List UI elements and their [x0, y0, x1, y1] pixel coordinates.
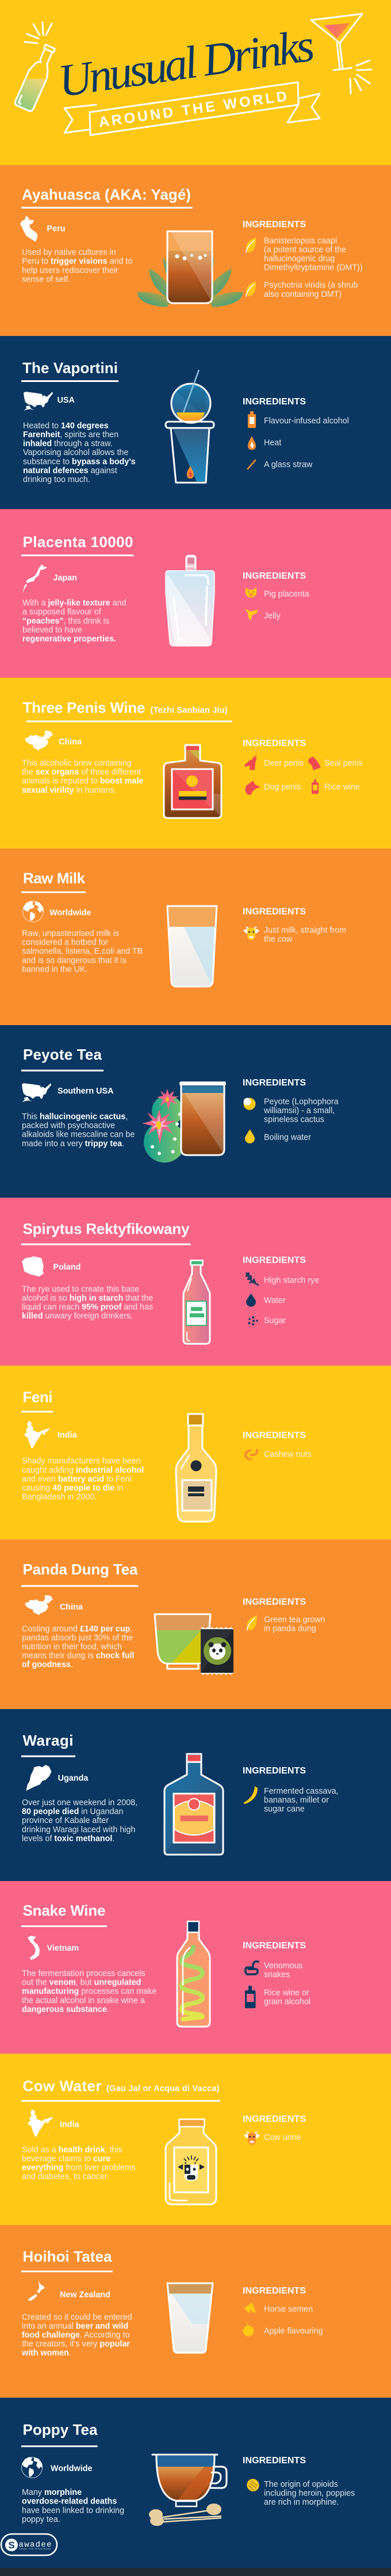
illustration: tea cup and packet — [155, 1614, 233, 1675]
map: China — [25, 1595, 53, 1615]
description: beverage claims to cure — [22, 2154, 110, 2164]
description: Bangladesh in 2000. — [22, 1492, 97, 1501]
ingredients: A glass straw — [264, 460, 313, 469]
icon: horse — [244, 2303, 256, 2313]
ingredients: hallucinogenic drug — [264, 254, 335, 263]
ingredients: The origin of opioids — [264, 2480, 338, 2489]
icon: cow on label — [178, 2155, 205, 2181]
icon: leaf — [246, 281, 256, 296]
icon: straw — [248, 460, 255, 469]
description: nutrition in their food, which — [22, 1642, 122, 1652]
country: China — [59, 737, 82, 747]
description: With a jelly-like texture and — [22, 598, 126, 607]
description: manufacturing — [22, 1987, 79, 1996]
ingredients: INGREDIENTS — [243, 907, 306, 917]
country: Poland — [53, 1263, 80, 1272]
description: alkaloids like mescaline can be — [22, 1130, 135, 1140]
ingredients: Sugar — [264, 1316, 286, 1325]
country: Peru — [47, 224, 66, 234]
ingredients: INGREDIENTS — [243, 220, 306, 230]
panel: Hoihoi Tatea — [0, 2225, 391, 2398]
description: substance to bypass a body's — [23, 457, 136, 467]
description: This hallucinogenic cactus, — [22, 1113, 128, 1122]
description: Many morphine — [22, 2488, 82, 2497]
country: USA — [57, 396, 75, 405]
icon: cow — [243, 927, 259, 940]
icon: leaf — [247, 1615, 257, 1630]
ingredients — [243, 907, 346, 944]
description: levels of toxic methanol. — [22, 1834, 114, 1843]
icon: seal — [308, 756, 321, 770]
map: New Zealand — [28, 2280, 45, 2301]
description: The rye used to create this base — [22, 1285, 139, 1294]
heading: Waragi — [23, 1732, 74, 1749]
ingredients — [243, 1941, 310, 2008]
icon: bottle — [245, 1986, 255, 2008]
description: Created so it could be entered — [22, 2313, 132, 2322]
map: USA — [22, 1083, 51, 1102]
description: out the venom, but unregulated — [22, 1978, 141, 1988]
ingredients: INGREDIENTS — [243, 1078, 306, 1088]
country: Japan — [53, 574, 77, 583]
map: India — [24, 1421, 49, 1448]
heading: Raw Milk — [23, 870, 86, 887]
description: 80 people died — [22, 1807, 79, 1817]
illustration: hoihoi glass — [167, 2283, 213, 2353]
panel: Three Penis Wine — [0, 678, 391, 849]
ingredients: Rice wine or — [264, 1988, 309, 1997]
heading: Panda Dung Tea — [23, 1561, 138, 1578]
description: and is so dangerous that it is — [22, 956, 126, 965]
description: in Ugandan — [81, 1807, 123, 1817]
map: USA — [24, 392, 53, 411]
ingredients: INGREDIENTS — [243, 1766, 306, 1776]
icon: drop — [245, 1129, 255, 1144]
description: against — [91, 466, 117, 475]
ingredients: INGREDIENTS — [243, 2115, 306, 2124]
ingredients — [243, 1766, 339, 1814]
map: Poland — [22, 1256, 44, 1276]
description: caught adding industrial alcohol — [22, 1466, 144, 1475]
ingredients: Boiling water — [264, 1133, 311, 1142]
description: , spirits are then — [60, 430, 118, 439]
panel: Panda Dung Tea — [0, 1539, 391, 1709]
ingredients: the cow — [264, 935, 293, 944]
description: inhaled — [23, 439, 52, 449]
description: Over just one weekend in 2008, — [22, 1798, 137, 1807]
description: made into a very trippy tea. — [22, 1139, 124, 1148]
ingredients — [243, 1078, 339, 1144]
icon: water drop — [246, 1293, 256, 1307]
illustration: spirytus bottle — [183, 1260, 210, 1344]
description: province of Kabale after — [22, 1816, 109, 1825]
ingredients: Apple flavouring — [264, 2327, 323, 2336]
description: . — [107, 2005, 109, 2015]
ingredients: Dog penis — [264, 782, 301, 792]
description: animals is reputed to boost male — [22, 777, 143, 786]
description: . — [69, 2349, 71, 2358]
description: believed to have — [22, 626, 82, 635]
ingredients — [243, 1256, 319, 1325]
ingredients: INGREDIENTS — [243, 1256, 306, 1266]
icon: peyote — [244, 1098, 255, 1110]
icon: banana — [243, 1786, 258, 1804]
ingredients: (a potent source of the — [264, 245, 346, 254]
ingredients: are rich in morphine. — [264, 2498, 339, 2507]
description: everything — [22, 2163, 63, 2172]
icon: martini glass — [311, 14, 362, 70]
description: “peaches” — [22, 617, 64, 626]
ingredients: williamsii) - a small, — [263, 1106, 335, 1115]
heading: Spirytus Rektyfikowany — [23, 1220, 190, 1237]
ingredients: INGREDIENTS — [243, 397, 306, 407]
description: the creators, it's very popular — [22, 2340, 130, 2349]
logo: Sawadee: S — [8, 2540, 15, 2551]
ingredients: Rice wine — [324, 782, 360, 792]
ingredients: INGREDIENTS — [243, 2456, 306, 2466]
ingredients: Just milk, straight from — [264, 926, 346, 935]
description: liquid can reach 95% proof and has — [22, 1303, 153, 1312]
ingredients: Heat — [264, 438, 281, 448]
description: killed — [22, 1312, 43, 1321]
description: packed with psychoactive — [22, 1121, 115, 1130]
description: overdose-related deaths — [22, 2497, 117, 2506]
ingredients — [243, 2456, 355, 2507]
illustration: peyote tea — [142, 1081, 226, 1163]
description: Raw, unpasteurised milk is — [22, 929, 119, 938]
description: from liver problems — [66, 2163, 136, 2172]
country: India — [60, 2120, 80, 2130]
ingredients — [243, 1431, 312, 1459]
heading: Placenta 10000 — [23, 533, 133, 551]
panel: Raw Milk — [0, 849, 391, 1025]
icon: jelly — [245, 609, 258, 621]
icon: snake — [246, 1962, 258, 1974]
description: into an annual beer and wild — [22, 2322, 128, 2331]
description: have been linked to drinking — [22, 2506, 124, 2515]
ingredients: snakes — [264, 1970, 290, 1979]
ingredients: spineless cactus — [264, 1115, 324, 1125]
logo: Sawadee — [1, 2534, 57, 2555]
ingredients: Horse semen — [264, 2305, 313, 2314]
ingredients: Seal penis — [324, 759, 363, 768]
ingredients: INGREDIENTS — [243, 1597, 306, 1607]
icon: tilted bottle — [14, 43, 59, 112]
icon: bottle — [248, 411, 256, 428]
ingredients: sugar cane — [264, 1805, 305, 1814]
ingredients: Deer penis — [264, 759, 304, 768]
description: drinking Waragi laced with high — [22, 1825, 135, 1834]
description: This alcoholic brew containing — [22, 759, 132, 768]
panel: Ayahuasca — [0, 165, 391, 336]
map: China — [25, 731, 53, 751]
icon: pig — [246, 587, 256, 598]
ingredients — [243, 739, 363, 795]
description: banned in the UK. — [22, 965, 87, 974]
panel: Peyote Tea — [0, 1025, 391, 1198]
ingredients: Pig placenta — [264, 590, 309, 599]
icon: deer — [244, 753, 257, 770]
ingredients: High starch rye — [264, 1276, 319, 1285]
ingredients: Peyote (Lophophora — [264, 1098, 339, 1107]
country: New Zealand — [60, 2291, 110, 2300]
subtitle: around the world: AROUND THE WORLD — [98, 88, 288, 131]
map: India — [28, 2109, 53, 2137]
illustration: pouch — [166, 556, 214, 646]
ingredients: Green tea grown — [264, 1615, 325, 1625]
description: poppy tea. — [22, 2515, 60, 2524]
panel: Waragi — [0, 1709, 391, 1881]
ingredients: INGREDIENTS — [243, 1431, 306, 1440]
icon: flame — [248, 436, 256, 450]
description: a supposed flavour of — [22, 607, 101, 617]
description: alcohol is so high in starch that the — [22, 1294, 153, 1303]
heading: Poppy Tea — [23, 2421, 98, 2438]
icon: dog — [245, 781, 260, 795]
description: causing 40 people to die in — [22, 1484, 123, 1493]
panel: Poppy Tea — [0, 2398, 391, 2568]
ingredients: grain alcohol — [264, 1997, 310, 2006]
ingredients: Venomous — [264, 1962, 303, 1971]
alternate name: (Tezhi Sanbian Jiu) — [151, 706, 228, 715]
description: Farenheit — [23, 430, 60, 439]
logo: Sawadee: Taste The Difference — [19, 2548, 51, 2550]
illustration: waragi bottle — [164, 1754, 223, 1855]
icon: cow — [244, 2132, 260, 2145]
description: Sold as a health drink, this — [22, 2146, 122, 2155]
ingredients: INGREDIENTS — [243, 1941, 306, 1951]
ingredients: Psychotria viridis (a shrub — [264, 281, 358, 290]
country: Uganda — [58, 1774, 89, 1783]
ingredients — [243, 220, 363, 299]
description: sexual virility — [22, 786, 74, 795]
description: unwary foreign drinkers. — [45, 1312, 133, 1321]
description: Heated to 140 degrees — [23, 421, 109, 430]
panel: The Vaportini — [0, 336, 391, 509]
description: food challenge — [22, 2331, 80, 2340]
illustration: snake wine bottle — [177, 1921, 210, 2027]
ingredients: Cow urine — [264, 2133, 301, 2142]
heading: Ayahuasca (AKA: Yagé) — [22, 186, 191, 203]
map: Uganda — [26, 1765, 52, 1791]
icon: cashew — [246, 1450, 257, 1459]
icon: martini sparkle rays — [350, 60, 371, 94]
icon: rye — [246, 1272, 259, 1285]
description: with women — [21, 2349, 69, 2358]
description: natural defences — [23, 466, 89, 475]
map: Vietnam — [28, 1936, 40, 1960]
description: processes can make — [81, 1987, 156, 1996]
ingredients: Fermented cassava, — [264, 1787, 339, 1796]
heading: Snake Wine — [23, 1902, 106, 1919]
panel: Snake Wine — [0, 1881, 391, 2054]
ingredients: Flavour-infused alcohol — [264, 416, 349, 426]
ingredients — [243, 571, 309, 621]
title: Unusual Drinks: Unusual Drinks — [55, 20, 317, 107]
ingredients: Banisteriopsis caapi — [264, 236, 337, 246]
ingredients: INGREDIENTS — [243, 739, 306, 748]
alternate name: (Gau Jal or Acqua di Vacca) — [106, 2084, 220, 2093]
icon: bottle sparkle rays — [25, 22, 52, 43]
icon: poppy — [244, 2476, 262, 2494]
heading: Feni — [23, 1389, 53, 1406]
description: Used by native cultures in — [22, 248, 116, 257]
heading: Three Penis Wine — [23, 699, 145, 716]
ingredients — [243, 2286, 323, 2337]
heading: Cow Water — [23, 2077, 101, 2095]
description: Peru to trigger visions and to — [22, 257, 132, 266]
description: salmonella, listeria, E.coli and TB — [22, 947, 143, 956]
description: through a straw. — [54, 439, 113, 449]
icon: bottle — [312, 779, 319, 794]
country: Worldwide — [49, 908, 91, 918]
description: the actual alcohol in snake wine a — [22, 1996, 145, 2005]
description: help users rediscover their — [22, 266, 118, 275]
panel: Spirytus Rektyfikowany — [0, 1198, 391, 1366]
icon: sugar — [248, 1316, 258, 1325]
map: Peru — [20, 216, 37, 242]
country: Vietnam — [47, 1944, 79, 1953]
ribbon banner — [64, 82, 320, 135]
description: regenerative properties. — [22, 635, 116, 644]
panel: Placenta 10000 — [0, 509, 391, 678]
illustration: wine bottle — [164, 745, 221, 818]
icon: leaf — [246, 238, 256, 253]
illustration: milk glass — [167, 906, 217, 987]
illustration: feni bottle — [176, 1414, 216, 1522]
map: Japan — [22, 564, 47, 593]
description: sense of self. — [22, 275, 70, 284]
description: Shady manufacturers have been — [22, 1457, 141, 1466]
description: drinking too much. — [23, 475, 90, 484]
ingredients: INGREDIENTS — [243, 571, 306, 581]
description: . According to — [80, 2331, 130, 2340]
country: China — [60, 1603, 83, 1612]
illustration: cow water bottle — [166, 2119, 216, 2204]
description: The fermentation process cancels — [22, 1969, 145, 1978]
icon: apple — [243, 2322, 254, 2337]
ingredients: also containing DMT) — [264, 290, 342, 299]
description: considered a hotbed for — [22, 938, 108, 947]
logo: Sawadee: awadee — [18, 2540, 52, 2550]
description: and diabetes, to cancer. — [22, 2172, 109, 2181]
illustration: vaportini — [166, 370, 214, 483]
ingredients: Water — [264, 1296, 286, 1305]
description: Vaporising alcohol allows the — [23, 448, 128, 457]
ingredients: in panda dung — [264, 1625, 316, 1634]
description: the sex organs of three different — [22, 767, 141, 777]
heading: Hoihoi Tatea — [23, 2248, 112, 2265]
heading: The Vaportini — [22, 359, 118, 376]
ingredients — [243, 2115, 306, 2145]
country: India — [57, 1431, 78, 1440]
ingredients — [243, 1597, 325, 1634]
ingredients: bananas, millet or — [264, 1796, 329, 1805]
description: means their dung is chock full — [22, 1652, 134, 1661]
panel: header — [0, 0, 391, 165]
country: Worldwide — [51, 2464, 92, 2474]
illustration: ayahuasca glass with leaves — [137, 231, 243, 307]
description: . — [71, 1660, 73, 1669]
ingredients: INGREDIENTS — [243, 2286, 306, 2296]
description: pandas absorb just 30% of the — [22, 1634, 133, 1643]
ingredients: including heroin, poppies — [264, 2489, 355, 2498]
description: , this drink is — [64, 617, 109, 626]
footer bar — [0, 2568, 391, 2576]
description: of goodness — [22, 1660, 71, 1669]
map: globe — [22, 2457, 43, 2478]
illustration: poppy tea cup — [149, 2455, 227, 2526]
heading: Peyote Tea — [23, 1046, 102, 1063]
description: and even battery acid to Feni — [22, 1475, 132, 1484]
ingredients: Dimethyltryptamine (DMT)) — [264, 263, 363, 273]
ingredients: Cashew nuts — [264, 1450, 312, 1459]
description: Costing around £140 per cup, — [22, 1625, 132, 1634]
description: dangerous substance — [22, 2005, 107, 2015]
panel: Feni — [0, 1366, 391, 1539]
country: Southern USA — [57, 1087, 114, 1096]
ingredients: Jelly — [264, 611, 281, 621]
panel: Cow Water — [0, 2054, 391, 2225]
ingredients — [243, 397, 349, 469]
map: globe — [23, 901, 44, 922]
description: in humans. — [76, 786, 117, 795]
